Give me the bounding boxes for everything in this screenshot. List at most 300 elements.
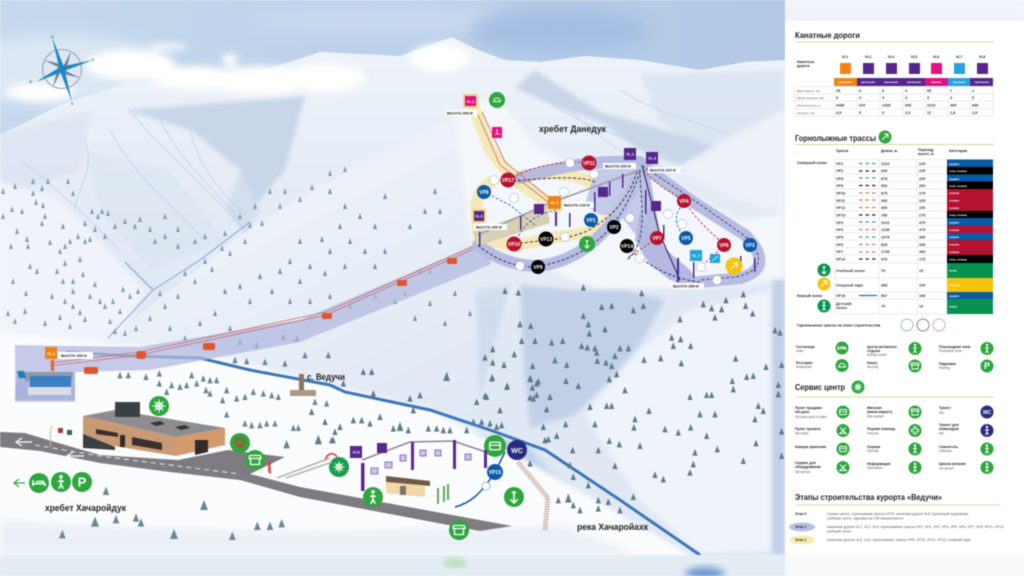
VL.2 sign: VL.2 bbox=[626, 152, 634, 156]
ski run table: средняя bbox=[949, 178, 959, 181]
station building bbox=[17, 371, 72, 395]
service legend: First-aid bbox=[867, 432, 879, 436]
run badges: VP2 bbox=[609, 225, 619, 231]
ski run table: 275 bbox=[919, 192, 925, 196]
cable car table: VL2 bbox=[865, 55, 871, 59]
road markings bbox=[35, 445, 240, 474]
arch bbox=[325, 454, 337, 461]
ski run table: 500 bbox=[881, 184, 887, 188]
ski area bbox=[58, 92, 759, 359]
cable car table: 6 bbox=[859, 89, 861, 93]
runs under construction bbox=[797, 319, 945, 331]
ski run table: средняя bbox=[949, 222, 959, 224]
kiosk hut bbox=[386, 476, 449, 504]
run badges: VP8 bbox=[479, 190, 489, 196]
green map badges bbox=[29, 396, 524, 540]
height labels: ВЫСОТА 2000 М bbox=[605, 164, 631, 168]
ski run table: 225 bbox=[919, 169, 925, 173]
ski run table: очень сложная bbox=[949, 170, 967, 173]
ski run table: 275 bbox=[919, 214, 925, 218]
stream on upper slope bbox=[108, 222, 250, 338]
ski run table: VP11 bbox=[836, 199, 845, 203]
ski run table: 1210 bbox=[881, 162, 889, 166]
height labels bbox=[58, 110, 704, 359]
cable car table: 2210 bbox=[927, 104, 935, 108]
ski run table: VP13 bbox=[836, 214, 845, 218]
restaurant badge bbox=[489, 92, 505, 108]
service legend: Ski service bbox=[795, 470, 811, 474]
heading: ski runs bbox=[795, 130, 994, 145]
cable car table: Канатные bbox=[797, 60, 814, 64]
cable car table: 65 bbox=[927, 89, 931, 93]
facility legend: Security bbox=[867, 365, 879, 369]
pink lift icon bbox=[492, 127, 502, 138]
height labels: ВЫСОТА 2337 М bbox=[650, 168, 676, 172]
service legend: Information bbox=[867, 466, 883, 470]
facility legend: Пешеходная зона bbox=[939, 345, 971, 349]
ski run table: 875 bbox=[881, 177, 887, 181]
cable car table: 35 bbox=[836, 89, 840, 93]
ski run table: 780 bbox=[881, 214, 887, 218]
compass rose: W bbox=[29, 80, 33, 84]
facility legend: Ресторан bbox=[796, 361, 813, 365]
right ridge snow bbox=[680, 110, 785, 215]
cable car table: кресельная bbox=[907, 81, 921, 84]
service legend: Туалет для bbox=[939, 423, 959, 427]
service legend: Пункт продажи bbox=[795, 406, 822, 410]
cable car table: 7 bbox=[950, 89, 952, 93]
flags bbox=[50, 425, 72, 447]
run badges: VP3 bbox=[745, 243, 755, 249]
compass rose: N bbox=[51, 35, 54, 39]
facility legend: Гостиница bbox=[796, 345, 816, 349]
ski run table: VP12 bbox=[836, 206, 845, 210]
VP15 run bbox=[455, 452, 505, 507]
VL.5 sign bbox=[472, 209, 486, 223]
cables and runs bbox=[478, 112, 758, 282]
service legend: Информация bbox=[867, 462, 890, 466]
cable car table: 5 bbox=[882, 111, 884, 115]
purple run bands bbox=[478, 162, 759, 282]
service legend: Lifesaver bbox=[939, 449, 953, 453]
height labels: ВЫСОТА 1850 М bbox=[673, 284, 699, 288]
mountain labels: хребет Данедук bbox=[539, 124, 606, 134]
ski run table: VP15 bbox=[836, 294, 845, 298]
ramps bbox=[277, 458, 332, 478]
VL.6 lift sign: VL.6 bbox=[466, 100, 475, 104]
cable car table: 3 bbox=[950, 96, 952, 100]
ski run table: сложная bbox=[949, 192, 960, 195]
service legend: Ski school bbox=[939, 466, 954, 470]
facility legend: Pedestrian zone bbox=[939, 349, 962, 353]
cable car table: 5 bbox=[859, 111, 861, 115]
ski run table: VP2 bbox=[836, 169, 843, 173]
ski run table: VP6 bbox=[836, 243, 843, 247]
ski run table: 470 bbox=[881, 258, 887, 262]
VL.1 sign: VL.1 bbox=[550, 201, 559, 205]
ski run table: сложная bbox=[949, 229, 960, 232]
ski run table: VP9 bbox=[836, 184, 843, 188]
ski run table: очень сложная bbox=[949, 258, 967, 262]
shelf by VL.5 bbox=[473, 206, 550, 246]
cable car table: Время подъема, мин bbox=[797, 96, 825, 100]
mountain streaks bbox=[20, 90, 730, 250]
legend panel bbox=[785, 21, 1024, 555]
lift pylons bbox=[479, 174, 756, 282]
gondola cable bbox=[50, 243, 480, 366]
ski run table: 10 bbox=[919, 304, 923, 308]
mountain labels: река Хачаройахк bbox=[577, 522, 648, 532]
ski run table: 400 bbox=[919, 250, 925, 254]
ski run table: 150 bbox=[919, 206, 925, 210]
run badges: VP1 bbox=[586, 218, 596, 224]
cable car table: 5 bbox=[972, 96, 974, 100]
cable car table: 4480 bbox=[836, 104, 844, 108]
terrain: central foreground slope bbox=[100, 105, 785, 450]
compass rose: S bbox=[71, 102, 74, 106]
village tower bbox=[290, 374, 316, 396]
construction stages: учебный склон, парковка на 234 машиноместа bbox=[827, 516, 903, 520]
service legend: инвалидов bbox=[939, 427, 960, 431]
cable car table: 650 bbox=[905, 104, 911, 108]
cable car table: 3 bbox=[927, 96, 929, 100]
ski run table: Перепад bbox=[918, 148, 934, 152]
cable car table: VL6 bbox=[933, 55, 939, 59]
ski run table: Учебный склон bbox=[836, 269, 866, 273]
ski run table: сложная bbox=[949, 251, 960, 254]
north slope fill bbox=[585, 165, 650, 240]
ski run table: 1010 bbox=[881, 221, 889, 225]
height labels: ВЫСОТА 2900 М bbox=[447, 112, 473, 116]
terrain: left foreground slope bbox=[0, 175, 145, 345]
ski run table: 250 bbox=[919, 243, 925, 247]
run badges bbox=[477, 156, 757, 274]
ski run table: 175 bbox=[919, 258, 925, 262]
run badges: VP4 bbox=[679, 199, 689, 205]
cable car table: дороги bbox=[797, 64, 810, 68]
facility legend: Киоск bbox=[867, 361, 878, 365]
heading: cable cars: Канатные дороги bbox=[795, 31, 860, 40]
run badges: VP7 bbox=[652, 236, 662, 242]
cable car table: VL7 bbox=[956, 55, 962, 59]
chair icons bbox=[534, 187, 661, 214]
cable car table: 2,5 bbox=[972, 111, 977, 115]
construction stages bbox=[789, 512, 1004, 544]
facility legend: Парковка bbox=[939, 362, 957, 366]
cable car table: 4 bbox=[905, 89, 908, 93]
yellow zone bands bbox=[471, 100, 637, 246]
fence bbox=[518, 462, 548, 530]
heading: service centre bbox=[795, 380, 994, 398]
ski run table: Длина, м. bbox=[881, 149, 898, 153]
cable car table: 8 bbox=[836, 96, 838, 100]
facility legend: P bbox=[984, 361, 990, 371]
height labels: ВЫСОТА 2100 М bbox=[564, 204, 590, 208]
ski run table: 1745 bbox=[881, 250, 889, 254]
service legend: Сервис для bbox=[795, 461, 816, 465]
cable car table: кресельная bbox=[884, 81, 898, 84]
ski run table: Детский bbox=[836, 302, 852, 306]
ski run table: VP3 bbox=[836, 221, 843, 225]
service legend: Камера хранения bbox=[795, 445, 826, 449]
ski run table: 825 bbox=[881, 243, 887, 247]
service legend: Пункт проката bbox=[795, 427, 821, 431]
cable car table: 4 bbox=[972, 89, 975, 93]
ski run table: VP4 bbox=[836, 228, 844, 232]
ski run table: VP14 bbox=[836, 258, 846, 262]
road direction arrows bbox=[16, 438, 84, 460]
construction stages: Канатные дороги VL5, VL6; горнолыжные трассы VP8, VP10, VP12, VP13; снежный парк bbox=[827, 538, 971, 542]
service legend: WC bbox=[983, 410, 992, 416]
service legend: Туалет bbox=[939, 406, 951, 410]
service legend: оборудования bbox=[795, 465, 821, 469]
compass rose: E bbox=[92, 58, 95, 62]
service legend: Магазин bbox=[867, 406, 882, 410]
construction stages: учебный склон bbox=[827, 530, 851, 534]
lower bowl fill bbox=[635, 210, 700, 285]
cable car table: 3 bbox=[859, 96, 861, 100]
cable car table: 12 bbox=[927, 111, 931, 115]
ski run table: 1075 bbox=[881, 236, 889, 240]
service legend: Security bbox=[867, 449, 879, 453]
gondola corridor band bbox=[15, 243, 492, 402]
ski run table: 465 bbox=[881, 284, 887, 288]
cable car table: Протяженность, м bbox=[797, 104, 821, 108]
valley shadows bbox=[475, 280, 785, 555]
ski run table: 630 bbox=[881, 169, 887, 173]
ski run table: VP5 bbox=[836, 236, 843, 240]
sky haze bbox=[0, 6, 650, 105]
trees: river bank bbox=[309, 368, 636, 513]
cable car table: VL8 bbox=[979, 55, 985, 59]
right margin top bbox=[785, 0, 1024, 21]
cable car table: кресельная bbox=[861, 81, 875, 84]
cable car table: 4 bbox=[882, 96, 885, 100]
terrain: lower right slopes bbox=[470, 280, 800, 570]
snow park badge bbox=[726, 258, 742, 274]
ski run table: легкая bbox=[949, 270, 957, 272]
VL.1 lower station sign bbox=[45, 347, 57, 359]
cable car table: 4 bbox=[905, 96, 908, 100]
cable car table: VL1 bbox=[842, 55, 848, 59]
run badges: VP10 bbox=[508, 242, 520, 248]
ski run table: Трасса bbox=[836, 149, 849, 153]
ski run table: 475 bbox=[919, 228, 925, 232]
base building bbox=[83, 402, 225, 456]
ski run table: 325 bbox=[919, 199, 925, 203]
service legend: Mini market bbox=[867, 414, 884, 418]
run markers under construction bbox=[490, 158, 722, 284]
VL.5 sign: VL.5 bbox=[475, 214, 483, 218]
facility legend: Parking bbox=[939, 366, 950, 370]
cable car table: 836 bbox=[972, 104, 978, 108]
facility legend bbox=[796, 342, 994, 372]
run badges: VP11 bbox=[583, 161, 595, 167]
ski run table: VP8 bbox=[836, 177, 843, 181]
facility legend: Restaurant bbox=[796, 365, 812, 369]
ski run table: высот, м. bbox=[918, 152, 935, 156]
left arrow bbox=[14, 479, 25, 487]
ski run table: сложная bbox=[949, 207, 960, 210]
construction stages: Канатные дороги VL1, VL2, VL4; горнолыжные трассы VP1, VP2, VP3, VP4, VP5, VP6, VP7, VP9, VP11, VP14; bbox=[827, 525, 1004, 529]
trees: central slope bbox=[168, 188, 472, 341]
trees: village area bbox=[59, 333, 336, 540]
VL.4 sign bbox=[646, 152, 658, 164]
ski run table: 225 bbox=[919, 162, 925, 166]
service legend: Ski rental bbox=[795, 432, 809, 436]
ski run table: Южный склон bbox=[797, 294, 822, 298]
ski run table: 100 bbox=[919, 284, 925, 288]
run badges: VP14 bbox=[621, 244, 633, 250]
station pylon bbox=[51, 360, 54, 371]
cable car table: бугельная bbox=[953, 81, 966, 84]
chairlift VL8: VL8 bbox=[353, 450, 359, 454]
ski run table: очень сложная bbox=[949, 185, 967, 188]
VL.1 lower station sign: VL.1 bbox=[47, 352, 55, 356]
VL.7 sign: VL.7 bbox=[692, 254, 700, 258]
height labels: ВЫСОТА 1900 М bbox=[476, 226, 502, 230]
ski run table: 1235 bbox=[881, 228, 889, 232]
cable car table: кресельная bbox=[975, 81, 989, 84]
shaded snow at bottom bbox=[0, 520, 640, 555]
run badges: VP17 bbox=[502, 178, 514, 184]
ski run table: 967 bbox=[881, 294, 887, 298]
ski run table: 200 bbox=[919, 184, 925, 188]
VL.4 sign: VL.4 bbox=[648, 156, 657, 160]
cable car table: 6,5 bbox=[836, 111, 841, 115]
cable car table: VL5 bbox=[911, 55, 917, 59]
ski run table: очень сложная bbox=[949, 214, 967, 217]
trees: lower right slopes bbox=[482, 284, 784, 482]
ski run table: легкая bbox=[949, 306, 957, 308]
service legend: (мини-маркет) bbox=[867, 410, 893, 414]
ski run table bbox=[797, 148, 993, 314]
terrain shadows bbox=[0, 70, 785, 270]
ski run table: 15 bbox=[919, 269, 923, 273]
road and plaza bbox=[0, 432, 512, 531]
ski run table: сноупарк bbox=[949, 284, 961, 287]
bottom blurred strip bbox=[0, 555, 1024, 576]
ski run table: средняя bbox=[949, 163, 959, 166]
WC badge: WC bbox=[511, 448, 523, 455]
construction stages: Этап 1 bbox=[795, 525, 806, 529]
training slope badge bbox=[579, 236, 595, 252]
cable car table: маятник bbox=[931, 81, 942, 84]
facility legend: Activity centre bbox=[867, 353, 887, 357]
green map badges: P bbox=[78, 474, 87, 490]
ski run table: сложная bbox=[949, 244, 960, 246]
service legend: Ski-pass point of sales bbox=[795, 415, 827, 419]
service legend: WC bbox=[939, 432, 945, 436]
cable car table: гондольная bbox=[838, 81, 853, 84]
VL.1 sign bbox=[548, 196, 561, 209]
ski run table: 196 bbox=[919, 294, 925, 298]
construction stages: Сервис центр, горнолыжная трасса VP15, канатная дорога VL8, бугельный подъемник, bbox=[827, 512, 969, 516]
cable car table: 610 bbox=[859, 104, 865, 108]
ski run table: Северный склон bbox=[797, 161, 827, 165]
facility legend: Hotel bbox=[796, 349, 804, 353]
cable car table: 2,5 bbox=[905, 111, 910, 115]
facility legend: отдыха bbox=[867, 349, 881, 353]
ski run table: средняя bbox=[949, 236, 959, 239]
VL.2 sign bbox=[624, 148, 636, 160]
terrain: back massif bbox=[0, 37, 785, 400]
mountain labels: хребет Хачаройдук bbox=[45, 503, 126, 513]
run badges: VP13 bbox=[540, 237, 552, 243]
ski run table: VP10 bbox=[836, 192, 845, 196]
terrain: lower left snow bbox=[0, 330, 690, 575]
ski run table: 475 bbox=[919, 221, 925, 225]
heading: ski runs: Горнолыжные трассы bbox=[795, 134, 876, 143]
surface lift icon bbox=[710, 254, 720, 263]
cable car table: 1435 bbox=[882, 104, 890, 108]
mountain labels: с. Ведучи bbox=[307, 372, 345, 382]
service legend: Спасатель bbox=[939, 445, 959, 449]
heading: service centre: Сервис центр bbox=[795, 383, 845, 392]
service legend: Первая помощь bbox=[867, 427, 896, 431]
cable car table: VL4 bbox=[888, 55, 894, 59]
river Hacharoyakh bbox=[66, 352, 700, 555]
mountain labels bbox=[45, 124, 648, 532]
gondola cabins bbox=[84, 258, 457, 374]
cable car table: 1,8 bbox=[950, 111, 955, 115]
ski run table: 70 bbox=[881, 269, 885, 273]
clouds bbox=[5, 44, 470, 101]
ski run table: 200 bbox=[919, 177, 925, 181]
compass rose bbox=[29, 35, 95, 106]
ski run table: 875 bbox=[881, 192, 887, 196]
ski run table: 70 bbox=[881, 304, 885, 308]
run badges: VP6 bbox=[719, 243, 729, 249]
ski run table: VP1 bbox=[836, 162, 843, 166]
VL.7 sign bbox=[690, 250, 702, 261]
chairlift VL8 bbox=[350, 440, 487, 491]
ski run table: 400 bbox=[881, 206, 887, 210]
WC badge bbox=[507, 440, 527, 460]
run badges: VP5 bbox=[681, 236, 691, 242]
runs under construction: Горнолыжные трассы на этапе строительства bbox=[797, 324, 881, 328]
ski run table: склон bbox=[836, 306, 848, 310]
cable car table: 6 bbox=[882, 89, 884, 93]
VP15 run: VP15 bbox=[489, 470, 501, 476]
run badges: VP9 bbox=[533, 265, 543, 271]
heading: construction stages: Этапы строительства курорта «Ведучи» bbox=[795, 493, 942, 502]
cable car table: Скорость, м/с bbox=[797, 111, 815, 115]
ski run table: Категория bbox=[949, 149, 967, 153]
height labels: ВЫСОТА 1500 М bbox=[61, 354, 87, 358]
terrain: white ridge under Danedook bbox=[455, 95, 785, 300]
service legend: WC bbox=[939, 411, 945, 415]
service legend: ski-pass bbox=[795, 410, 809, 414]
cable car table bbox=[795, 55, 993, 116]
service legend: Охрана bbox=[867, 445, 881, 449]
construction stages: Этап 2 bbox=[795, 538, 806, 542]
no entry sign bbox=[268, 462, 270, 473]
cable car table: 465 bbox=[950, 104, 956, 108]
construction stages: Этап 0 bbox=[795, 512, 806, 516]
white snowfields bbox=[585, 290, 770, 553]
service legend: Школа катания bbox=[939, 462, 966, 466]
ski run table: VP7 bbox=[836, 250, 843, 254]
ski run table: 900 bbox=[881, 199, 887, 203]
service legend bbox=[795, 406, 994, 474]
VL.6 lift sign bbox=[463, 94, 478, 108]
ski run table: средняя bbox=[949, 295, 959, 298]
cable car table: Вместимость, чел bbox=[797, 89, 821, 93]
lower station inset bbox=[15, 371, 75, 400]
ski run table: сложная bbox=[949, 200, 960, 202]
facility legend: Центр активного bbox=[867, 345, 898, 349]
